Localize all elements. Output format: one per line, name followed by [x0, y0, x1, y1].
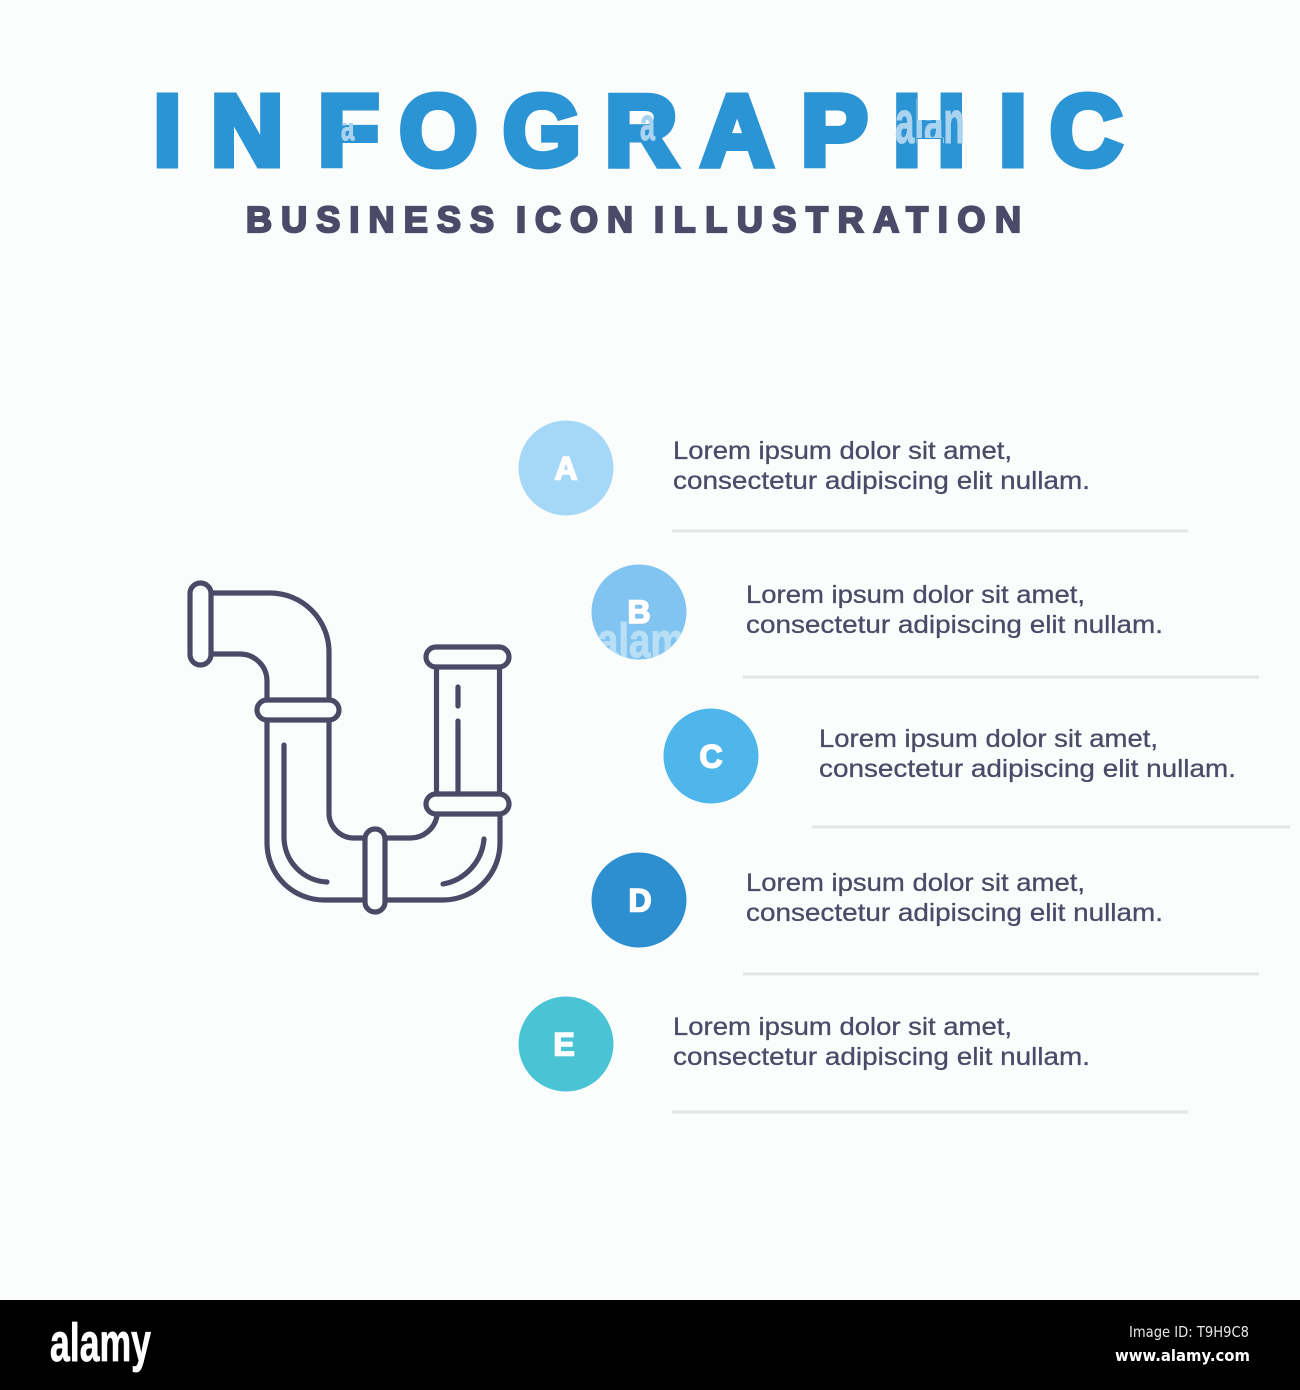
step A: A: [554, 450, 578, 486]
step C: [664, 708, 1290, 828]
subtitle: BUSINESS: [246, 199, 494, 240]
title: a: [640, 99, 655, 150]
step E: Lorem ipsum dolor sit amet,: [673, 1013, 1012, 1041]
step D: D: [628, 882, 652, 918]
step D: consectetur adipiscing elit nullam.: [746, 899, 1163, 927]
subtitle: ICON: [516, 199, 633, 240]
subtitle: [246, 199, 1021, 240]
step C: Lorem ipsum dolor sit amet,: [819, 725, 1158, 753]
footer bar: Image ID: T9H9C8: [1129, 1323, 1249, 1341]
step E: [518, 996, 1188, 1114]
subtitle: ILLUSTRATION: [654, 199, 1021, 240]
icon: drain pipe: [190, 583, 509, 912]
step B: [592, 564, 1259, 678]
title: alan: [895, 90, 965, 156]
step D: Lorem ipsum dolor sit amet,: [746, 869, 1085, 897]
step B: alamy: [597, 615, 706, 668]
footer bar: alamy: [50, 1313, 151, 1373]
step A: consectetur adipiscing elit nullam.: [673, 467, 1090, 495]
step C: C: [699, 738, 723, 774]
step E: E: [553, 1026, 575, 1062]
title: [156, 92, 1124, 170]
step B: B: [627, 594, 651, 630]
title: INFOGRAPHIC: [154, 75, 1122, 187]
step D: [592, 852, 1259, 976]
step A: Lorem ipsum dolor sit amet,: [673, 437, 1012, 465]
step A: [518, 420, 1188, 532]
step E: consectetur adipiscing elit nullam.: [673, 1043, 1090, 1071]
step B: Lorem ipsum dolor sit amet,: [746, 581, 1085, 609]
title: a: [341, 104, 355, 148]
footer bar: www.alamy.com: [1115, 1346, 1250, 1365]
step B: consectetur adipiscing elit nullam.: [746, 611, 1163, 639]
step C: consectetur adipiscing elit nullam.: [819, 755, 1236, 783]
footer bar: [0, 1300, 1300, 1390]
